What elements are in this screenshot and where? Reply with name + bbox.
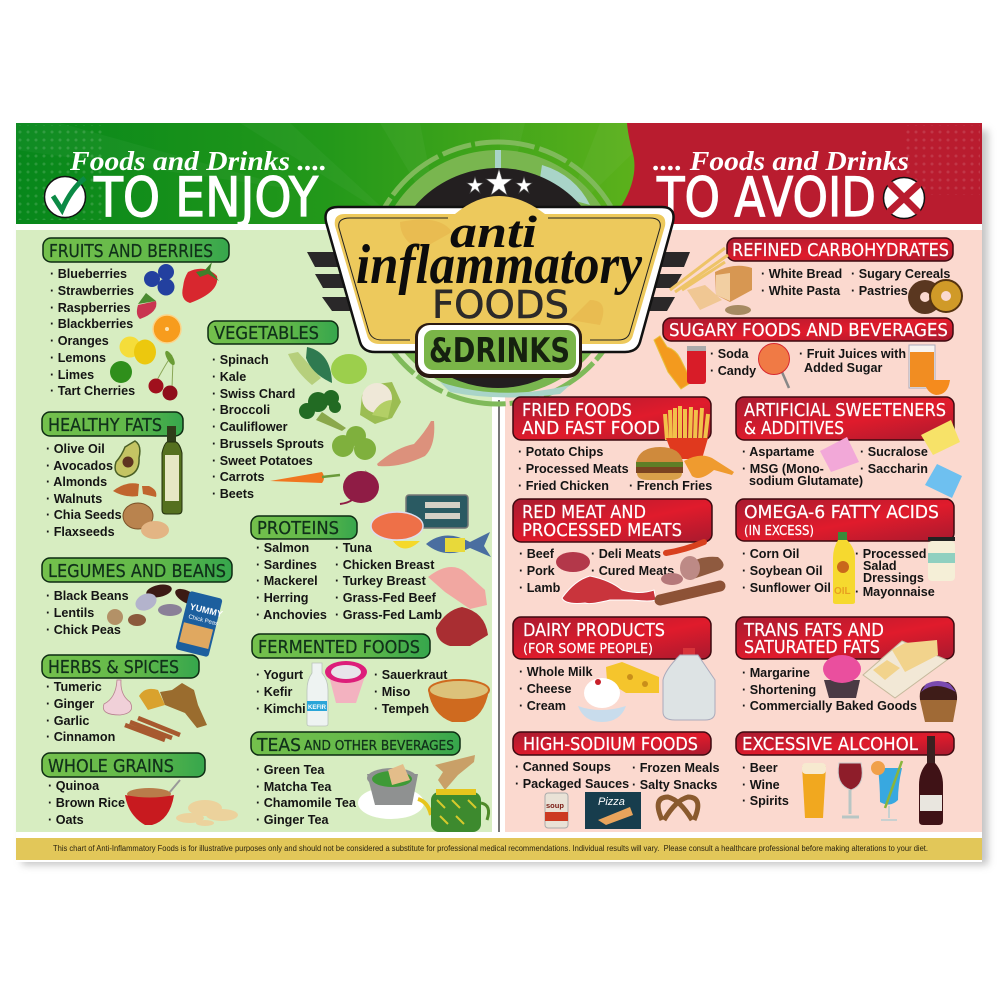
heading: (FOR SOME PEOPLE): [523, 641, 653, 657]
title: foods: FOODS: [432, 283, 569, 327]
section: herbs and spices: [42, 655, 207, 744]
list: [761, 267, 950, 298]
title: inflammatory: inflammatory: [356, 234, 643, 296]
heading: AND FAST FOOD: [522, 419, 660, 439]
list: · Soda: [710, 347, 749, 361]
heading: [513, 617, 711, 659]
list: [46, 442, 122, 539]
list: [515, 760, 719, 792]
heading: & ADDITIVES: [744, 419, 844, 439]
icon: soup can: [545, 793, 568, 828]
panel: foods to avoid: [505, 230, 982, 832]
list: · Garlic: [46, 714, 89, 728]
icon: oil bottle: OIL: [834, 586, 851, 597]
list: · Cream: [519, 699, 566, 713]
list: · Pastries: [851, 284, 908, 298]
heading: HEALTHY FATS: [48, 416, 162, 436]
icon: beet: [340, 470, 379, 504]
list: · Flaxseeds: [46, 525, 115, 539]
decorative globe: [367, 142, 629, 404]
heading: RED MEAT AND: [522, 503, 646, 523]
list: · Oats: [48, 813, 84, 827]
heading: HERBS & SPICES: [48, 658, 179, 678]
icon: cupcake with berry: [920, 681, 957, 722]
icon: x mark: [884, 178, 924, 218]
drinks pill: &DRINKS: [429, 331, 570, 371]
list: · Chicken Breast: [335, 558, 435, 572]
list: · Ginger Tea: [256, 813, 330, 827]
icon: ginger root: [435, 755, 475, 790]
list: sodium Glutamate): [749, 474, 863, 488]
heading: (IN EXCESS): [744, 524, 814, 539]
icon: pizza box: Pizza: [598, 796, 625, 808]
list: · Sugary Cereals: [851, 267, 950, 281]
icon: cocktail: [871, 761, 902, 820]
list: · Tuna: [335, 541, 373, 555]
icon: mayonnaise jar: [928, 537, 955, 581]
header left text: [44, 146, 327, 229]
icon: pizza box: [585, 792, 641, 829]
list: · Kale: [212, 370, 246, 384]
heading: SATURATED FATS: [744, 638, 880, 658]
subtitle: foods and drinks avoid: .... Foods and Drinks: [653, 146, 909, 176]
list: · Salty Snacks: [632, 778, 717, 792]
heading: [251, 732, 460, 756]
list: · Fruit Juices with: [799, 347, 906, 361]
heading: REFINED CARBOHYDRATES: [732, 241, 949, 261]
list: · Beef: [519, 547, 555, 561]
heading: [736, 617, 954, 659]
icon: sausage: [666, 542, 704, 553]
list: · Soybean Oil: [742, 564, 822, 578]
footer: disclaimer: This chart of Anti-Inflammatory Foods is for illustrative purposes only and should not be considered a substitute for professional medical recommendations. Individual results will vary. Please consult a healthcare professional before making alterations to your diet.: [53, 844, 928, 853]
icon: teapot: [418, 789, 489, 832]
header: red band: [600, 123, 982, 224]
icon: yellow packet: [921, 420, 960, 455]
section: dairy: [513, 617, 715, 722]
icon: wine bottle: [919, 736, 943, 825]
list: · Shortening: [742, 683, 816, 697]
icon: chard: [288, 352, 321, 385]
list: · Oranges: [50, 334, 109, 348]
icon: oats: [176, 800, 238, 826]
list: · Frozen Meals: [632, 761, 719, 775]
icon: orange wedge: [924, 380, 950, 395]
section: excessive alcohol: [736, 732, 954, 825]
list: [256, 668, 448, 716]
icon: chicken: [428, 567, 487, 609]
icon: soda bottle: [654, 336, 692, 389]
list: · Yogurt: [256, 668, 304, 682]
list: [46, 680, 115, 744]
list: · Pork: [519, 564, 556, 578]
icon: blue packet: [925, 464, 962, 498]
section: fermented foods: [252, 634, 489, 726]
icon: whipped cream bowl: [578, 678, 626, 722]
list: · Tart Cherries: [50, 384, 135, 398]
list: · Chick Peas: [46, 623, 121, 637]
list: · Cured Meats: [591, 564, 674, 578]
list: · Commercially Baked Goods: [742, 699, 917, 713]
icon: check mark: [44, 176, 86, 218]
list: · Cheese: [519, 682, 572, 696]
icon: salmon: [371, 512, 423, 540]
list: · Lemons: [50, 351, 106, 365]
icon: cheese: [606, 662, 659, 693]
list: · Turkey Breast: [335, 574, 427, 588]
icon: lemons: [120, 336, 156, 364]
section: sugary foods: [654, 318, 953, 395]
list: · Mayonnaise: [855, 585, 935, 599]
section: high sodium: [513, 732, 719, 829]
list: · Chia Seeds: [46, 508, 122, 522]
icon: sardine tin: [406, 495, 468, 528]
list: · Processed: [855, 547, 926, 561]
list: · Beer: [742, 761, 778, 775]
icon: chick pea can: [175, 591, 226, 658]
list: · Margarine: [742, 666, 810, 680]
icon: wine glass: [838, 763, 862, 817]
icon: orange slice: [153, 315, 181, 343]
list: · French Fries: [629, 479, 712, 493]
icon: salami stick: [660, 586, 720, 600]
list: [710, 347, 906, 378]
icon: beans: [133, 582, 201, 616]
section: healthy fats: [42, 412, 183, 539]
heading: FRIED FOODS: [522, 401, 632, 421]
list: · Sucralose: [860, 445, 928, 459]
heading: WHOLE GRAINS: [48, 757, 174, 777]
icon: soup can: soup: [546, 801, 564, 810]
icon: kale: [306, 347, 332, 383]
icon: ginger: [139, 683, 207, 728]
list: · Packaged Sauces: [515, 777, 629, 791]
list: · Blueberries: [50, 267, 127, 281]
section: trans fats: [736, 617, 957, 722]
icon: chick pea can: Chick Peas: [188, 614, 219, 627]
icon: jar: [687, 346, 706, 384]
list: · Lentils: [46, 606, 94, 620]
heading: DAIRY PRODUCTS: [523, 621, 665, 641]
list: · Sauerkraut: [374, 668, 448, 682]
icon: blueberries: [144, 264, 174, 296]
icon: miso bowl: [428, 680, 489, 722]
heading: FRUITS AND BERRIES: [49, 242, 213, 262]
list: Salad: [863, 559, 897, 573]
list: · Black Beans: [46, 589, 129, 603]
heading: EXCESSIVE ALCOHOL: [742, 735, 918, 755]
section: teas: [251, 732, 489, 832]
icon: cupcake: [823, 655, 861, 698]
icon: grains: [725, 305, 751, 315]
icon: almonds: [113, 483, 156, 497]
icon: donuts: [908, 280, 962, 314]
list: [256, 541, 442, 622]
icon: cinnamon sticks: [125, 718, 180, 740]
heading: HIGH-SODIUM FOODS: [523, 735, 698, 755]
list: · Grass-Fed Beef: [335, 591, 437, 605]
section: red meat: [513, 499, 724, 604]
section: refined carbohydrates: [670, 238, 962, 315]
panel: foods to enjoy: [16, 230, 492, 832]
icon: kefir bottle: [307, 663, 328, 726]
heading: to avoid: TO AVOID: [656, 166, 876, 229]
icon: olive oil bottle: [162, 426, 182, 514]
section: vegetables: [208, 321, 434, 504]
heading: [513, 397, 711, 440]
icon: juice glass: [909, 345, 935, 388]
section: omega 6: [736, 499, 955, 604]
section: legumes and beans: [42, 558, 232, 658]
side stripes: [307, 252, 690, 311]
list: · Brussels Sprouts: [212, 437, 324, 451]
heading: to enjoy: TO ENJOY: [93, 166, 319, 229]
section: whole grains: [42, 753, 238, 827]
list: [50, 267, 135, 398]
list: [518, 445, 712, 493]
icon: steak: [562, 576, 656, 604]
icon: fried chicken leg: [684, 456, 734, 478]
list: · Processed Meats: [518, 462, 629, 476]
list: · Raspberries: [50, 301, 130, 315]
list: [742, 445, 928, 488]
list: · Wine: [742, 778, 780, 792]
list: · Quinoa: [48, 779, 100, 793]
list: · Tempeh: [374, 702, 429, 716]
heading: PROCESSED MEATS: [522, 521, 682, 541]
icon: lollipop: [758, 344, 790, 388]
list: · Swiss Chard: [212, 387, 295, 401]
heading: [513, 499, 712, 542]
heading: ARTIFICIAL SWEETENERS: [744, 401, 946, 421]
list: · Whole Milk: [519, 665, 593, 679]
list: · MSG (Mono-: [742, 462, 824, 476]
icon: yogurt cup: [325, 661, 367, 703]
drinks pill: [415, 323, 582, 378]
center divider: [498, 400, 500, 832]
subtitle: foods and drinks: Foods and Drinks ....: [69, 146, 327, 176]
list: [256, 763, 357, 827]
icon: fries: [665, 406, 708, 459]
icon: milk jug: [663, 648, 715, 720]
list: [212, 353, 324, 501]
icon: fish: [426, 532, 491, 557]
list: · Carrots: [212, 470, 264, 484]
icon: bread: [687, 266, 752, 310]
section: artificial sweeteners: [736, 397, 962, 498]
badge yellow: [335, 196, 665, 344]
icon: lemon slice: [393, 541, 420, 548]
section: fried foods: [513, 397, 734, 493]
icon: green tea cup: [358, 764, 424, 819]
list: · Matcha Tea: [256, 780, 332, 794]
icon: bowl: [125, 780, 180, 825]
heading: TRANS FATS AND: [743, 621, 884, 641]
list: [742, 761, 789, 808]
list: · Sunflower Oil: [742, 581, 831, 595]
list: [742, 666, 917, 713]
list: [742, 547, 935, 599]
list: · Almonds: [46, 475, 107, 489]
list: · Lamb: [519, 581, 561, 595]
icon: burger: [636, 447, 683, 480]
list: · Potato Chips: [518, 445, 603, 459]
icon: carrot: [270, 472, 340, 483]
icon: sweet potato: [377, 421, 434, 466]
list: · Mackerel: [256, 574, 318, 588]
list: · Saccharin: [860, 462, 928, 476]
icon: beer glass: [802, 763, 826, 818]
icon: cauliflower: [360, 382, 401, 424]
list: · Brown Rice: [48, 796, 125, 810]
list: · Miso: [374, 685, 411, 699]
icon: cherries: [148, 350, 178, 400]
list: Added Sugar: [804, 361, 882, 375]
list: · Herring: [256, 591, 308, 605]
section: fruits and berries: [43, 238, 229, 400]
list: · Olive Oil: [46, 442, 105, 456]
icon: strawberry: [182, 262, 219, 303]
icon: raw beef: [436, 607, 488, 646]
icon: avocado: [115, 441, 140, 477]
badge outline: [326, 207, 674, 352]
icon: broccoli: [299, 390, 346, 431]
list: · Kimchi: [256, 702, 306, 716]
header: green band: [16, 123, 636, 224]
list: · Ginger: [46, 697, 94, 711]
list: · Candy: [710, 364, 756, 378]
icon: brussels sprouts: [332, 426, 376, 460]
heading: VEGETABLES: [214, 324, 319, 344]
heading: PROTEINS: [257, 519, 339, 539]
heading: TEAS: [256, 736, 301, 756]
list: · Salmon: [256, 541, 309, 555]
list: [519, 547, 674, 595]
list: · Strawberries: [50, 284, 134, 298]
icon: garlic: [103, 680, 132, 715]
footer: disclaimer: [16, 838, 982, 860]
icon: pink packet: [820, 437, 859, 472]
list: · Tumeric: [46, 680, 102, 694]
list: [46, 589, 129, 637]
list: · Canned Soups: [515, 760, 611, 774]
list: · Avocados: [46, 459, 113, 473]
heading: [736, 397, 954, 440]
icon: butter on paper: [863, 640, 947, 698]
list: · Beets: [212, 487, 254, 501]
icon: cabbage: [331, 354, 367, 384]
list: · Cauliflower: [212, 420, 288, 434]
header right text: [653, 146, 924, 229]
list: · Sweet Potatoes: [212, 454, 313, 468]
icon: lentils: [107, 609, 146, 626]
list: · Kefir: [256, 685, 292, 699]
list: · Spinach: [212, 353, 269, 367]
title: anti: anti: [450, 206, 537, 257]
section: proteins: [251, 495, 491, 646]
list: · White Bread: [761, 267, 842, 281]
list: · Green Tea: [256, 763, 325, 777]
logo: anti inflammatory foods and drinks: [307, 142, 690, 404]
list: · Deli Meats: [591, 547, 661, 561]
list: · Grass-Fed Lamb: [335, 608, 442, 622]
list: · White Pasta: [761, 284, 841, 298]
list: · Walnuts: [46, 492, 102, 506]
heading: LEGUMES AND BEANS: [48, 562, 226, 582]
icon: pretzel: [658, 797, 698, 820]
icon: oil bottle: [833, 532, 855, 604]
icon: raspberry: [137, 293, 156, 319]
list: · Aspartame: [742, 445, 814, 459]
list: · Cinnamon: [46, 730, 115, 744]
icon: beef slice: [556, 552, 590, 572]
icon: salami chunk: [661, 556, 724, 585]
list: · Limes: [50, 368, 94, 382]
icon: walnuts: [123, 503, 169, 539]
list: · Spirits: [742, 794, 789, 808]
list: · Sardines: [256, 558, 317, 572]
list: · Blackberries: [50, 317, 133, 331]
list: · Anchovies: [256, 608, 327, 622]
icon: pasta: [670, 248, 728, 292]
list: · Chamomile Tea: [256, 796, 357, 810]
icon: lime: [110, 361, 132, 383]
heading: FERMENTED FOODS: [258, 638, 420, 658]
black circle: [388, 168, 608, 388]
icon: chick pea can: YUMMY: [189, 601, 224, 619]
heading: [736, 499, 954, 541]
heading: AND OTHER BEVERAGES: [304, 739, 454, 754]
list: [48, 779, 125, 827]
list: · Corn Oil: [742, 547, 799, 561]
list: · Broccoli: [212, 403, 270, 417]
stars: [467, 169, 532, 195]
heading: SUGARY FOODS AND BEVERAGES: [669, 321, 948, 341]
icon: kefir bottle: KEFIR: [308, 705, 327, 711]
list: Dressings: [863, 571, 924, 585]
list: · Fried Chicken: [518, 479, 609, 493]
list: [519, 665, 593, 713]
heading: OMEGA-6 FATTY ACIDS: [744, 503, 939, 523]
